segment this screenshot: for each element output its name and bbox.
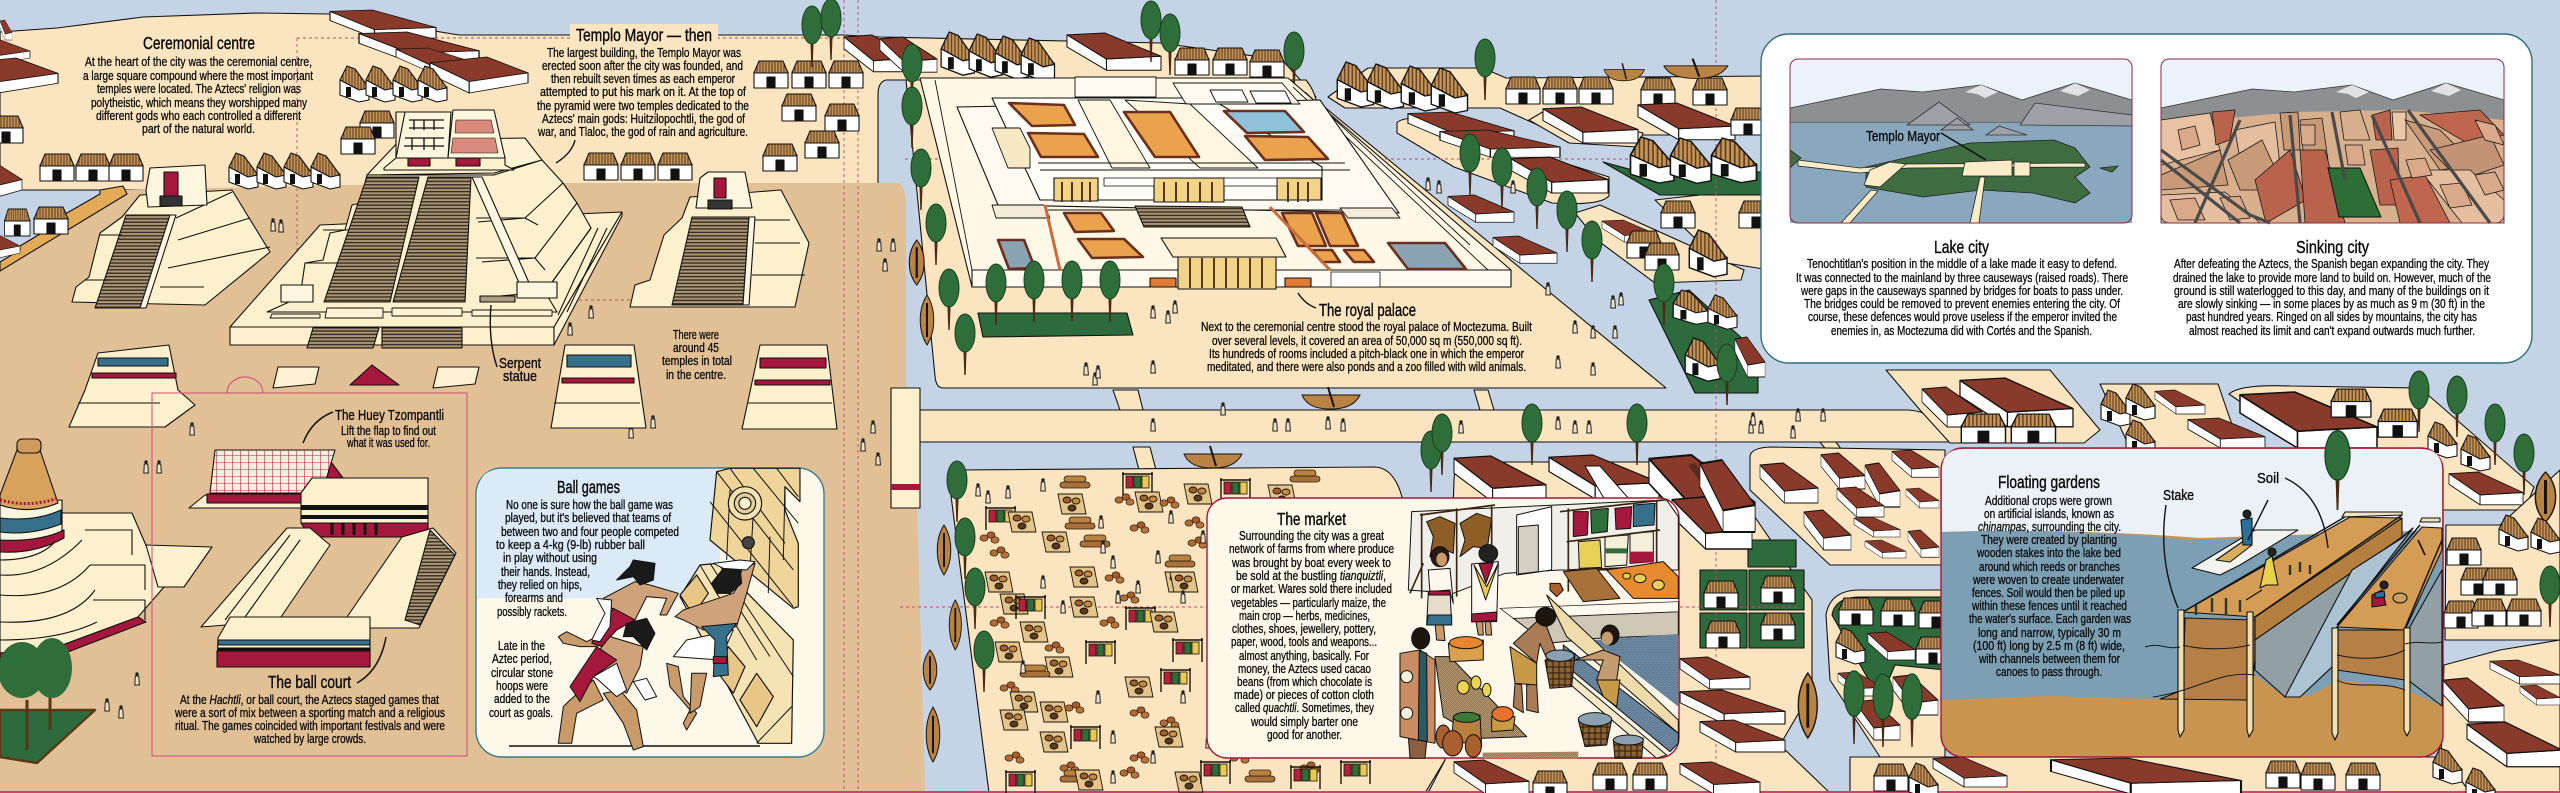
heading: sinking city: Sinking city — [2296, 237, 2369, 257]
stone hoops text — [489, 639, 553, 720]
heading: floating gardens: Floating gardens — [1998, 472, 2100, 492]
twin shrines — [384, 112, 514, 170]
bridges — [1113, 390, 1856, 470]
ceremonial centre text: polytheistic, which means they worshipped many — [91, 96, 308, 110]
floating gardens text: chinampas, surrounding the city. — [1978, 520, 2121, 534]
woman with tunic — [1408, 737, 1427, 758]
templo mayor text: The largest building, the Templo Mayor was — [547, 46, 741, 60]
ball games text: their hands. Instead, — [501, 565, 590, 579]
ball court text: watched by large crowds. — [253, 732, 366, 746]
market text: Surrounding the city was a great — [1239, 529, 1384, 543]
label: serpent statue — [499, 355, 542, 385]
floating gardens text — [1969, 494, 2131, 679]
temple left — [72, 165, 270, 308]
baskets — [1545, 653, 1575, 688]
court walls — [201, 528, 456, 628]
twin stairways — [324, 177, 419, 302]
royal palace text — [1201, 320, 1532, 374]
market stalls and wares — [947, 461, 1371, 793]
floating gardens text: within these fences until it reached — [1971, 599, 2127, 613]
ceremonial centre text: part of the natural world. — [142, 122, 255, 136]
royal palace complex — [920, 77, 1511, 289]
caption: flap note — [341, 424, 436, 450]
ceremonial centre text: a large square compound where the most important — [83, 69, 313, 83]
ceremonial centre text: At the heart of the city was the ceremonial centre, — [85, 55, 312, 69]
player three — [667, 560, 755, 730]
round temple — [0, 439, 212, 664]
dashed fold guides — [297, 0, 1800, 793]
gatehouse column — [891, 388, 920, 508]
royal palace text: Next to the ceremonial centre stood the royal palace of Moctezuma. Built — [1201, 320, 1532, 334]
man with basket — [1513, 683, 1538, 713]
ball games text: possibly rackets. — [497, 605, 567, 619]
label: serpent statue: Serpent — [499, 355, 542, 372]
mat with produce — [1435, 657, 1527, 738]
templo mayor text: erected soon after the city was founded, and — [542, 59, 743, 73]
arrow to tzompantli — [303, 412, 333, 443]
hanging cloths — [1573, 512, 1588, 537]
green garden pads — [1603, 162, 1945, 700]
ball court text — [174, 693, 445, 746]
temple count note: in the centre. — [666, 368, 726, 382]
templo mayor text: then rebuilt seven times as each emperor — [551, 72, 735, 86]
skull rack — [189, 450, 352, 508]
ball court text: were a sort of mix between a sporting match and a religious — [174, 706, 445, 720]
main temple: Templo Mayor — [230, 110, 622, 348]
floating gardens text: the water's surface. Each garden was — [1969, 612, 2131, 626]
floating gardens text: around which reeds or branches — [1979, 560, 2120, 574]
stone hoops text: added to the — [494, 692, 550, 706]
stakes — [2178, 610, 2410, 740]
heading: the royal palace: The royal palace — [1319, 300, 1416, 320]
templo mayor text: Aztecs' main gods: Huitzilopochtli, the god of — [542, 112, 745, 126]
templo mayor text: attempted to put his mark on it. At the top of — [540, 85, 746, 99]
panel: ball games — [476, 468, 824, 757]
market text: or market. Wares sold there included — [1231, 582, 1392, 596]
heading: templo mayor then: Templo Mayor — then — [576, 25, 712, 45]
royal palace text: Its hundreds of rooms included a pitch-black one in which the emperor — [1209, 347, 1524, 361]
lake city text: were gaps in the causeways spanned by bridges for boats to pass under. — [1800, 284, 2123, 298]
market text: would simply barter one — [1250, 715, 1358, 729]
lake city text: course, these defences would prove useless if the emperor invited the — [1808, 310, 2117, 324]
market text — [1229, 529, 1394, 742]
temple count note — [662, 328, 732, 382]
floating gardens text: (100 ft) long by 2.5 m (8 ft) wide, — [1973, 639, 2125, 653]
lake city text: enemies in, as Moctezuma did with Cortés and the Spanish. — [1831, 324, 2092, 338]
heading: ceremonial centre: Ceremonial centre — [143, 33, 255, 53]
stone hoops text: hoops were — [496, 679, 548, 693]
temple count note: There were — [673, 328, 719, 342]
map: lake city — [1790, 59, 2132, 223]
ceremonial centre text: different gods who each controlled a different — [96, 109, 301, 123]
ball games text: played, but it's believed that teams of — [505, 511, 671, 525]
ceremonial centre text — [83, 55, 313, 136]
floating gardens text: with channels between them for — [1978, 652, 2120, 666]
map arrow — [1941, 133, 1986, 160]
panel: huey tzompantli and ball court — [152, 377, 467, 756]
templo mayor text — [537, 46, 749, 139]
woman in white blouse — [1435, 623, 1445, 641]
panel: floating gardens — [1941, 431, 2443, 757]
label: soil: Soil — [2257, 470, 2279, 487]
floating gardens text: long and narrow, typically 30 m — [1978, 626, 2121, 640]
north shore land — [0, 13, 1316, 190]
market text: clothes, shoes, jewellery, pottery, — [1232, 622, 1376, 636]
label: stake: Stake — [2163, 487, 2194, 504]
ball games text: they relied on hips, — [498, 578, 582, 592]
man in canoe — [1575, 650, 1620, 680]
caption: flap note: what it was used for. — [346, 436, 430, 450]
ball court text: ritual. The games coincided with important festivals and were — [175, 719, 445, 733]
market text: be sold at the bustling tianquiztli, — [1236, 569, 1386, 583]
market text: made) or pieces of cotton cloth — [1234, 688, 1374, 702]
market text: called quachtli. Sometimes, they — [1235, 701, 1375, 715]
label: templo mayor on map: Templo Mayor — [1866, 128, 1940, 145]
heading: the market: The market — [1277, 509, 1346, 529]
lake city text — [1796, 257, 2128, 338]
stone hoops text: Late in the — [498, 639, 545, 653]
lake city text: Tenochtitlan's position in the middle of a lake made it easy to defend. — [1807, 257, 2117, 271]
arrow to ball court — [357, 637, 386, 683]
market text: paper, wood, tools and weapons... — [1231, 635, 1377, 649]
stone hoops text: circular stone — [491, 666, 553, 680]
sinking city text: are slowly sinking — in some places by as much as 9 m (30 ft) in the — [2178, 297, 2485, 311]
market scene — [1400, 500, 1678, 758]
ball court text: At the Hachtli, or ball court, the Aztecs staged games that — [180, 693, 439, 707]
southern city buildings — [1421, 371, 2560, 793]
ceremonial plaza — [0, 183, 925, 793]
panel: lake city and sinking city — [1761, 34, 2532, 363]
causeway — [917, 410, 1950, 442]
garden tree — [2325, 431, 2350, 510]
royal palace island — [906, 80, 1666, 388]
temple count note: temples in total — [662, 354, 732, 368]
ball games text: between two and four people competed — [501, 525, 679, 539]
caption: flap note: Lift the flap to find out — [341, 424, 436, 438]
heading: the ball court: The ball court — [268, 672, 351, 692]
market text: network of farms from where produce — [1229, 542, 1394, 556]
market text: almost anything, basically. For — [1239, 649, 1369, 663]
north temple of court — [301, 478, 428, 537]
northeast islands — [1328, 68, 2560, 793]
market text: beans (from which chocolate is — [1237, 675, 1372, 689]
market text: money, the Aztecs used cacao — [1238, 662, 1371, 676]
sinking city text: almost reached its limit and can't expand outwards much further. — [2189, 324, 2475, 338]
floating gardens text: Additional crops were grown — [1985, 494, 2112, 508]
arrow to soil — [2285, 478, 2328, 548]
temple count note: around 45 — [673, 341, 719, 355]
stone court wall — [680, 468, 800, 743]
woman from behind — [1476, 622, 1492, 635]
floating gardens text: on artificial islands, known as — [1984, 507, 2114, 521]
orange compound wall — [0, 186, 127, 271]
floating gardens text: wooden stakes into the lake bed — [1976, 546, 2121, 560]
garden beds — [2160, 512, 2442, 706]
planter with trees — [0, 638, 95, 763]
lower temples — [69, 345, 837, 429]
ball games text: forearms and — [505, 591, 563, 605]
royal palace text: meditated, and there were also ponds and a zoo filled with wild animals. — [1207, 360, 1526, 374]
market text: main crop — herbs, medicines, — [1239, 609, 1370, 623]
ball games text: No one is sure how the ball game was — [506, 498, 673, 512]
arrow to palace — [1298, 293, 1316, 308]
market island — [949, 467, 1445, 793]
southern city island — [1428, 462, 1830, 793]
canoe and paddler — [2192, 500, 2298, 575]
templo mayor text: war, and Tlaloc, the god of rain and agriculture. — [537, 125, 748, 139]
floating gardens text: fences. Soil would then be piled up — [1972, 586, 2125, 600]
sinking city text: past hundred years. Ringed on all sides by mountains, the city has — [2186, 310, 2477, 324]
floating gardens text: were woven to create underwater — [1972, 573, 2124, 587]
floating gardens text: They were created by planting — [1981, 533, 2117, 547]
stone hoops text: court as goals. — [489, 706, 553, 720]
temple right — [630, 172, 809, 307]
player one — [558, 560, 678, 647]
arrow to serpent statue — [490, 305, 497, 367]
royal palace text: over several levels, it covered an area of 50,000 sq m (550,000 sq ft). — [1212, 334, 1522, 348]
lake city text: The bridges could be removed to prevent enemies entering the city. Of — [1804, 297, 2120, 311]
sinking city text — [2173, 257, 2491, 338]
ball games text: to keep a 4-kg (9-lb) rubber ball — [496, 538, 645, 552]
arrow to shrines — [556, 140, 575, 163]
hides on frame — [1427, 513, 1492, 557]
ball games text — [496, 498, 679, 619]
sinking city text: drained the lake to provide more land to build on. However, much of the — [2173, 271, 2491, 285]
market text: was brought by boat every week to — [1231, 556, 1391, 570]
ball games text: in play without using — [503, 551, 597, 565]
player two — [558, 618, 657, 750]
floating gardens text: canoes to pass through. — [1996, 665, 2102, 679]
people on plaza and causeway — [105, 177, 1825, 718]
palace courtyards — [998, 103, 1466, 269]
sinking city text: After defeating the Aztecs, the Spanish began expanding the city. They — [2174, 257, 2490, 271]
palace trees and green bed — [902, 44, 1133, 375]
farmers and crops — [2196, 540, 2425, 615]
label: serpent statue: statue — [503, 368, 537, 385]
panel: the market — [1207, 498, 1679, 758]
market text: good for another. — [1267, 728, 1342, 742]
heading: the huey tzompantli: The Huey Tzompantli — [335, 407, 444, 424]
aerial view: sinking city — [2161, 59, 2504, 223]
sinking city text: ground is still waterlogged to this day, and many of the buildings on it — [2174, 284, 2489, 298]
south temple of court — [217, 617, 370, 667]
ceremonial centre text: temples were located. The Aztecs' religion was — [97, 82, 301, 96]
lake city text: It was connected to the mainland by three causeways (raised roads). There — [1796, 271, 2128, 285]
heading: lake city: Lake city — [1934, 237, 1989, 257]
arrow to stake — [2164, 505, 2178, 608]
serpent statue and side shrines — [281, 282, 557, 302]
heading: ball games: Ball games — [557, 477, 620, 497]
pink bottom rule — [0, 791, 2560, 793]
templo mayor text: the pyramid were two temples dedicated to the — [537, 99, 749, 113]
palace front colonnades — [1054, 178, 1321, 289]
stone hoops text: Aztec period, — [492, 652, 552, 666]
boats — [909, 240, 1360, 762]
northern buildings — [0, 0, 1773, 405]
market text: vegetables — particularly maize, the — [1231, 596, 1386, 610]
